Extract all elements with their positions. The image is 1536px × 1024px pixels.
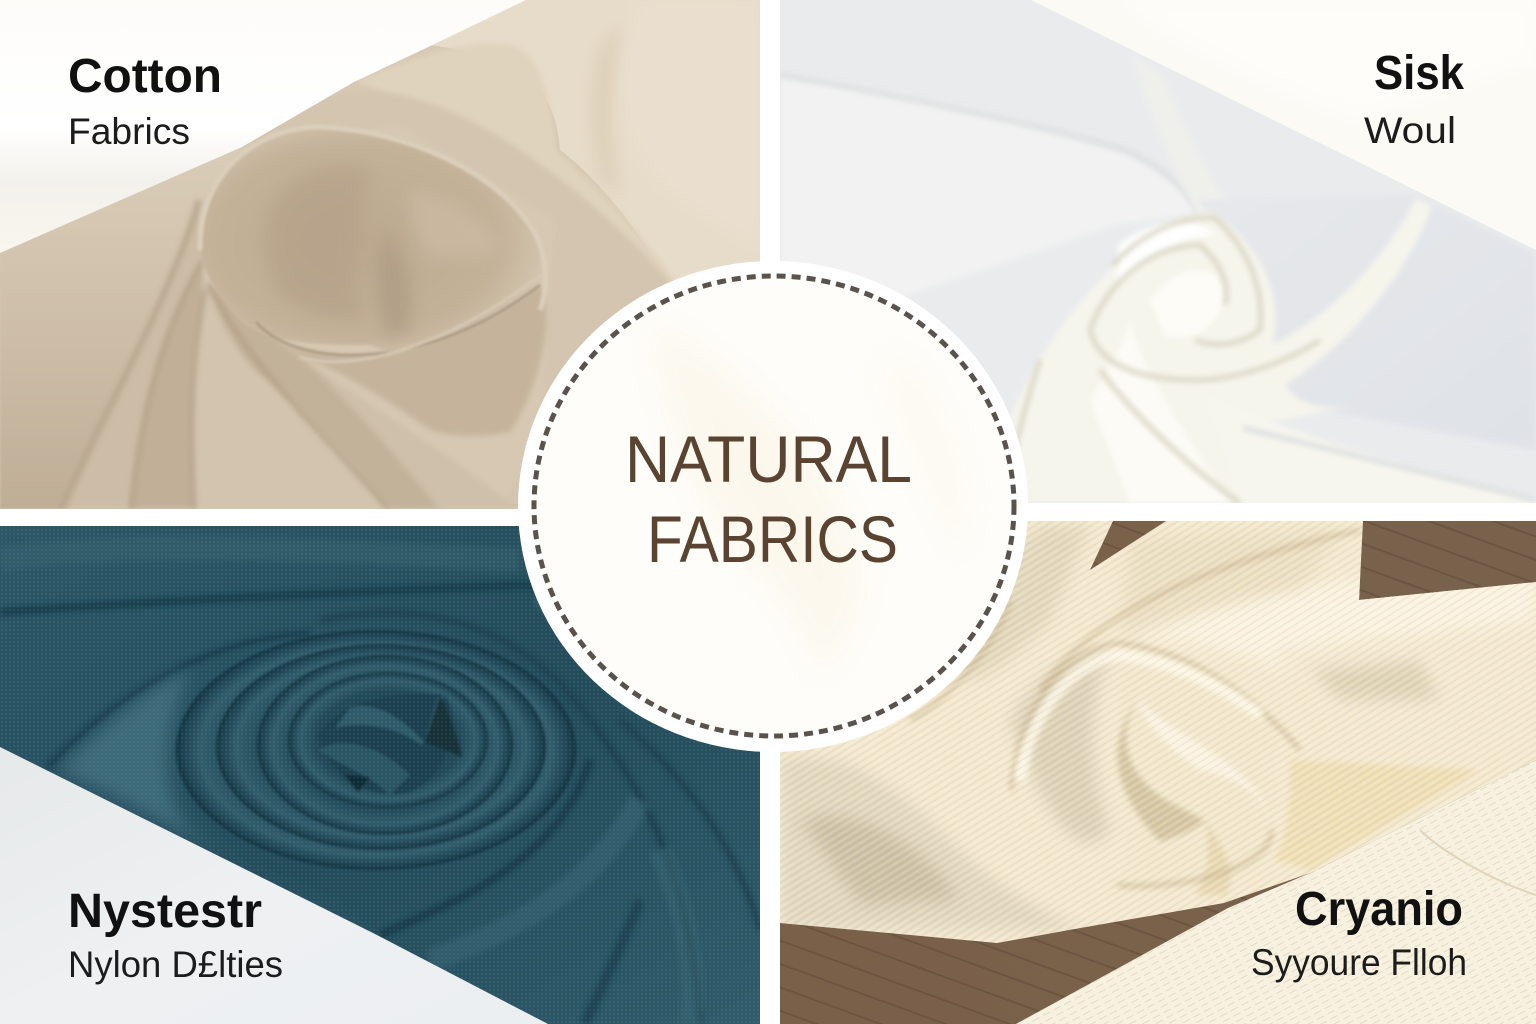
lighter lower-left fold: [64, 672, 192, 836]
dashed ring: [534, 276, 1014, 736]
beige base cloth: [0, 0, 650, 509]
label: silk: Sisk: [1374, 47, 1464, 100]
twill texture: [780, 521, 1536, 951]
badge title: FABRICS: [647, 502, 898, 576]
rose fold: [1116, 650, 1480, 895]
panel: teal fabric: [0, 526, 760, 1024]
label: cotton: [68, 50, 222, 152]
top ridge line: [782, 74, 1186, 195]
white corner sheet: [0, 0, 526, 253]
left drape: [0, 306, 152, 509]
panel: silk fabric: [780, 0, 1536, 503]
main swirl cloth: [1011, 200, 1431, 502]
label: cryanio: Syyoure Flloh: [1251, 942, 1467, 983]
lower cup fold: [292, 288, 548, 437]
centre badge: [518, 261, 1028, 752]
badge cloth fill: [536, 278, 1012, 734]
rolled centre interior: [200, 127, 542, 355]
white lower-left sheet: [0, 747, 548, 1024]
cup crease and roll edge: [200, 127, 548, 362]
panel: cream twill fabric on wood: [780, 521, 1536, 1024]
badge title: NATURAL: [625, 422, 912, 496]
label: silk: Woul: [1364, 110, 1456, 151]
label: nystestr: Nystestr: [68, 885, 262, 938]
concentric rolled rings: [176, 630, 576, 870]
badge cloth folds: [650, 320, 968, 680]
wood table: [780, 521, 1536, 1024]
badge title: [625, 422, 912, 576]
label: cryanio: Cryanio: [1295, 883, 1463, 936]
badge white disc: [518, 261, 1028, 752]
upright ridge at right: [593, 44, 614, 182]
mottled interior shade: [276, 176, 486, 335]
radiating folds: [69, 221, 502, 509]
top crest fold: [363, 46, 666, 274]
right drape folds: [380, 720, 760, 1024]
wide band around roll: [399, 96, 670, 308]
cream cloth body: [780, 521, 1536, 951]
sheet highlights: [1120, 0, 1536, 120]
fold shadows: [63, 200, 388, 509]
silk base: [780, 0, 1536, 503]
swirl crease shadows: [1005, 218, 1536, 503]
wood planks: [780, 521, 1536, 1024]
label: silk: [1364, 47, 1464, 151]
label: cryanio: [1251, 883, 1467, 983]
hem stitch texture: [1016, 760, 1536, 1024]
bright swirl heart: [1095, 224, 1222, 500]
folded cream hem: [1016, 760, 1536, 1024]
cloth shading: [780, 525, 1536, 930]
label: cotton: Fabrics: [68, 111, 190, 152]
label: nystestr: [68, 885, 283, 985]
woven texture: [0, 526, 760, 1024]
teal base: [0, 526, 760, 1024]
grey right area: [1200, 195, 1536, 450]
crest highlight: [1020, 655, 1262, 780]
light cloth at right: [432, 0, 760, 280]
label: cotton: Cotton: [68, 50, 222, 103]
band below top ridge: [780, 75, 1195, 340]
white corner sheet: [1031, 0, 1536, 250]
upright ridge: [1188, 190, 1202, 212]
panel: cotton fabric: [0, 0, 760, 510]
lower right cloth: [1257, 424, 1338, 447]
swirl centre fold: [318, 694, 462, 795]
upper drape folds: [0, 548, 640, 767]
label: nystestr: Nylon D£lties: [68, 944, 283, 985]
hem fold line: [1420, 830, 1536, 895]
soft crease shadows: [910, 530, 1360, 886]
